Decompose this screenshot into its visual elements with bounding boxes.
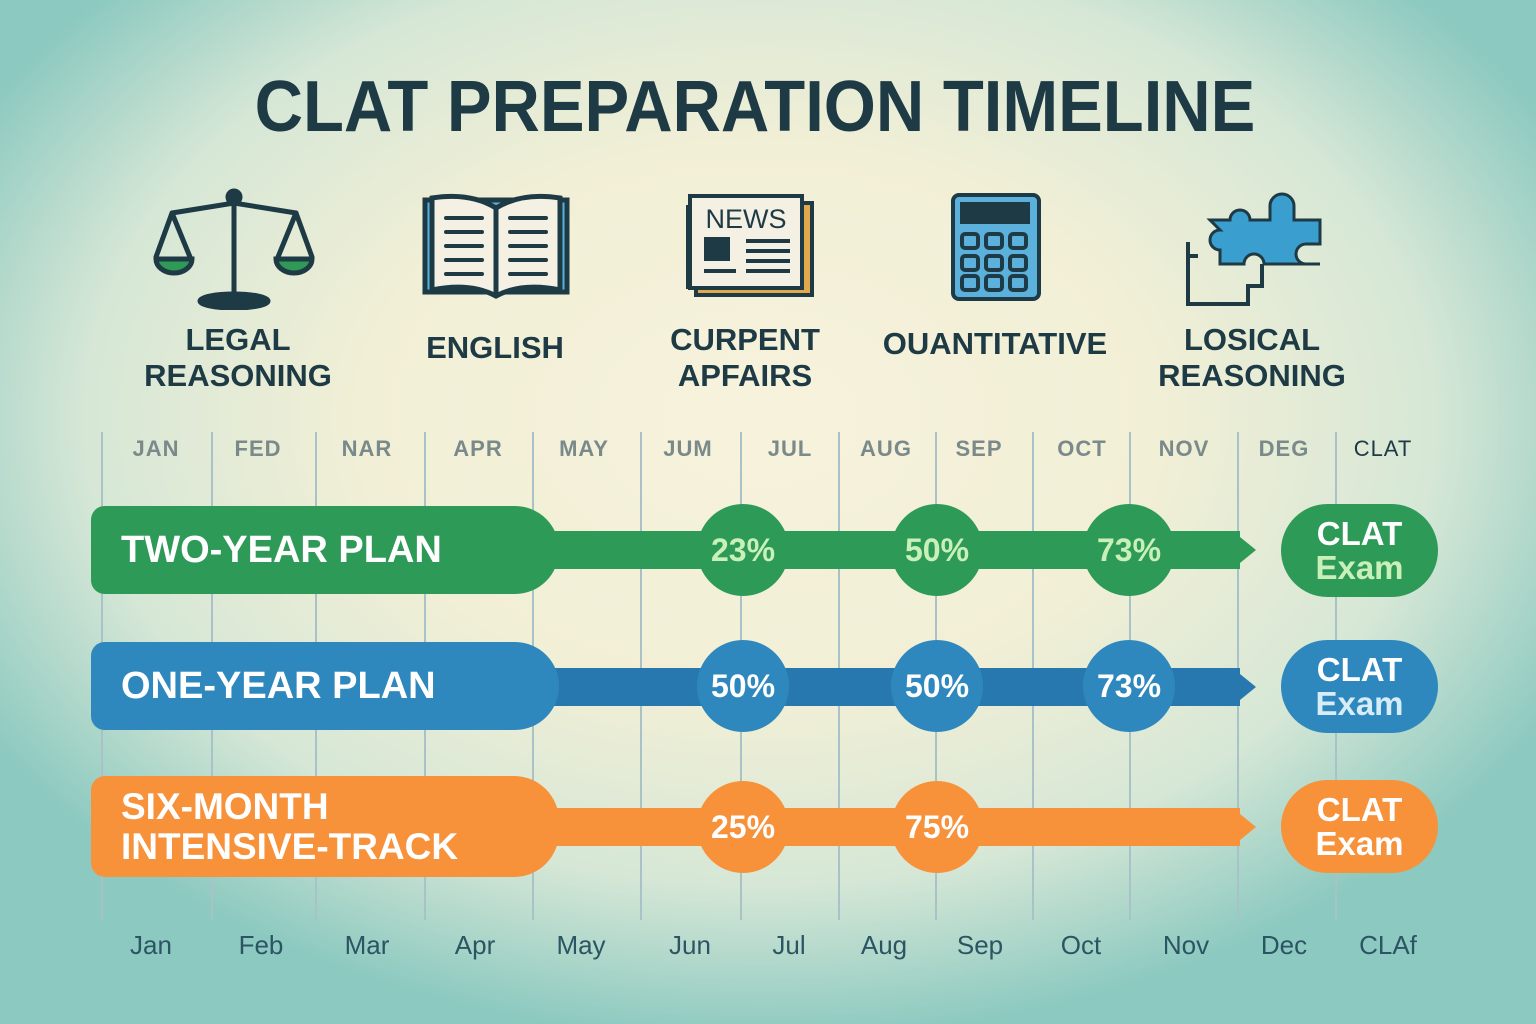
month labels top: DEG (1259, 436, 1309, 461)
label: legal reasoning (144, 322, 332, 393)
month labels bottom: Jul (772, 930, 806, 960)
row: six-month intensive track: 75% (905, 808, 969, 844)
row: two-year plan: 73% (1097, 532, 1161, 568)
icon: puzzle (1186, 192, 1322, 306)
label: legal reasoning: LEGAL (185, 322, 291, 357)
month labels top: OCT (1057, 436, 1107, 461)
month labels bottom: CLAf (1359, 930, 1417, 960)
label: current affairs (670, 322, 820, 393)
row: six-month intensive track (91, 776, 1438, 877)
month labels top: FED (234, 436, 282, 461)
label: english: ENGLISH (426, 330, 564, 365)
month labels bottom: Oct (1061, 930, 1101, 960)
row: two-year plan: 23% (711, 532, 775, 568)
row: one-year plan: ONE-YEAR PLAN (121, 665, 436, 707)
row: two-year plan (91, 504, 1438, 597)
month labels top: JAN (132, 436, 180, 461)
row: six-month intensive track: Exam (1315, 825, 1404, 862)
row: six-month intensive track: 25% (711, 808, 775, 844)
row: two-year plan: 50% (905, 532, 969, 568)
month labels bottom: Nov (1163, 930, 1209, 960)
row: six-month intensive track: INTENSIVE-TRACK (121, 826, 458, 866)
title: CLAT PREPARATION TIMELINE (255, 67, 1255, 147)
month labels bottom: Feb (239, 930, 283, 960)
month labels bottom: May (556, 930, 606, 960)
label: current affairs: CURPENT (670, 322, 820, 357)
icon: newspaper: NEWS (706, 204, 786, 234)
icon: newspaper (686, 194, 814, 297)
month labels top: JUL (768, 436, 812, 461)
month labels top: APR (453, 436, 503, 461)
row: one-year plan: Exam (1315, 685, 1404, 722)
label: current affairs: APFAIRS (678, 358, 812, 393)
month labels bottom: Jun (669, 930, 711, 960)
label: quantitative: OUANTITATIVE (883, 326, 1107, 361)
icon: calculator (951, 193, 1041, 301)
month labels bottom (130, 930, 1417, 960)
month labels bottom: Dec (1261, 930, 1307, 960)
month labels top: CLAT (1354, 436, 1412, 461)
row: two-year plan: CLAT (1317, 515, 1402, 552)
label: logical reasoning: REASONING (1158, 358, 1346, 393)
month labels top: SEP (955, 436, 1003, 461)
month labels top: JUM (663, 436, 713, 461)
row: one-year plan (91, 640, 1438, 733)
month labels top: NOV (1159, 436, 1209, 461)
row: one-year plan: 73% (1097, 668, 1161, 704)
label: logical reasoning: LOSICAL (1184, 322, 1320, 357)
icon: scales (154, 188, 314, 310)
row: two-year plan: TWO-YEAR PLAN (121, 529, 442, 571)
label: logical reasoning (1158, 322, 1346, 393)
month labels bottom: Aug (861, 930, 907, 960)
month labels top: NAR (342, 436, 392, 461)
row: six-month intensive track: CLAT (1317, 791, 1402, 828)
month labels bottom: Mar (345, 930, 389, 960)
label: legal reasoning: REASONING (144, 358, 332, 393)
row: one-year plan: 50% (905, 668, 969, 704)
row: one-year plan: 50% (711, 668, 775, 704)
row: one-year plan: CLAT (1317, 651, 1402, 688)
month labels top: MAY (559, 436, 609, 461)
month labels top (132, 436, 1412, 461)
month labels bottom: Sep (957, 930, 1003, 960)
month labels bottom: Apr (455, 930, 495, 960)
month labels top: AUG (860, 436, 912, 461)
icon: book (422, 194, 570, 299)
row: six-month intensive track: SIX-MONTH (121, 786, 329, 826)
month labels bottom: Jan (130, 930, 172, 960)
row: two-year plan: Exam (1315, 549, 1404, 586)
